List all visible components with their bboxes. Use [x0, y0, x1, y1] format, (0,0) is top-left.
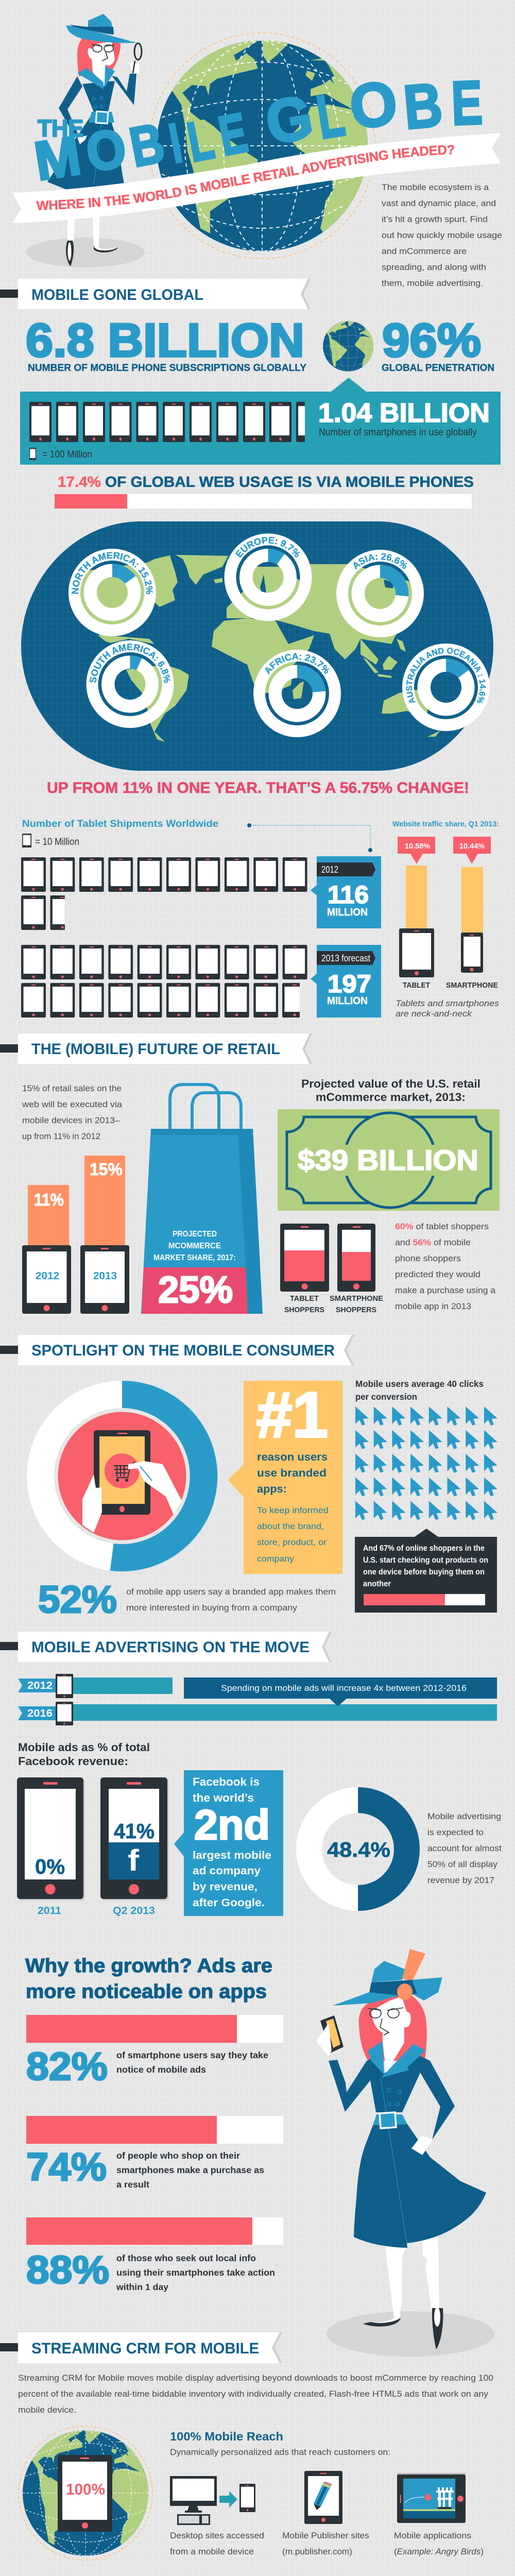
panel: 67% of online shoppers	[355, 1529, 497, 1613]
text: retail sales: web will be executed via	[22, 1099, 123, 1109]
heading: 100% Mobile Reach: 100% Mobile Reach	[170, 2430, 283, 2443]
heading: Why the growth: more noticeable on apps	[26, 1981, 267, 2003]
icon: tablet 60%	[280, 1224, 329, 1292]
text: shoppers prediction: mobile app in 2013	[395, 1301, 471, 1311]
text: mobile advertising 50%	[427, 1811, 502, 1885]
stat: 17.4% web usage: OF GLOBAL WEB USAGE IS VIA MOBILE PHONES	[105, 474, 474, 490]
captions: reach channels: Mobile Publisher sites	[282, 2531, 369, 2540]
heading: Mobile Advertising on the Move: MOBILE ADVERTISING ON THE MOVE	[31, 1639, 310, 1656]
text: shoppers prediction: and 56% of mobile	[395, 1238, 471, 1247]
title: The Mobile Globe: L	[312, 80, 349, 152]
icon: globe	[146, 30, 378, 259]
card: 2013 forecast, 197 million: MILLION	[327, 995, 368, 1007]
heading: tablet shipments: Number of Tablet Shipments Worldwide	[22, 819, 218, 829]
stat: 88% take action: using their smartphones take action	[116, 2267, 275, 2278]
banner: subtitle ribbon	[12, 133, 501, 223]
heading: Facebook revenue: Facebook revenue:	[18, 1755, 128, 1768]
stat: 17.4% web usage: 17.4%	[58, 474, 101, 490]
heading: Streaming CRM for Mobile	[0, 2332, 282, 2363]
heading: Mobile Advertising on the Move	[0, 1632, 332, 1662]
pictogram: 2013 forecast tablet shipments	[21, 945, 307, 1018]
hero: mobile globe illustration	[26, 30, 378, 267]
title: The Mobile Globe	[30, 68, 484, 192]
heading: Mobile Gone Global	[0, 279, 311, 309]
text: streaming CRM intro: mobile device.	[18, 2405, 76, 2415]
stat: 82% smartphone users: of smartphone users say they take	[116, 2050, 268, 2060]
stat: 82% smartphone users: notice of mobile ads	[116, 2064, 206, 2075]
chart: website traffic share: Website traffic share, Q1 2013:	[392, 820, 499, 828]
text: intro paragraph: and mCommerce are	[382, 246, 467, 256]
icon: smartphone	[461, 933, 483, 973]
panel: 67% of online shoppers: And 67% of online shoppers in the	[363, 1544, 485, 1553]
chart: phone Q2 2013, 41%	[100, 1777, 169, 1917]
card: 2012, 116 million: 116	[328, 882, 369, 909]
text: retail sales: mobile devices in 2013–	[22, 1115, 121, 1125]
text: intro paragraph: it’s hit a growth spurt. Find	[382, 214, 488, 224]
stat: 52%: more interested in buying from a company	[126, 1603, 298, 1613]
icon: tablet	[399, 928, 434, 977]
chart: website traffic share: 10.58%	[405, 842, 430, 851]
icon: globe with phone, 100%: 100%	[66, 2480, 105, 2498]
text: retail sales: up from 11% in 2012	[22, 1131, 100, 1141]
title: The Mobile Globe: B	[401, 70, 445, 142]
chart: phone Q2 2013, 41%: Q2 2013	[113, 1905, 155, 1917]
chart: ad spend 2012 vs 2016: 2016	[27, 1708, 53, 1719]
icon: globe with phone, 100%	[16, 2424, 154, 2560]
heading: projected value	[301, 1077, 480, 1104]
captions: reach channels: Desktop sites accessed	[170, 2531, 264, 2540]
text: mobile advertising 50%: account for almost	[427, 1843, 502, 1853]
icon: desktop to mobile	[170, 2476, 255, 2525]
text: 40 clicks per conversion: Mobile users average 40 clicks	[355, 1379, 484, 1389]
stat: 6.8 billion subscriptions: 6.8 BILLION	[26, 314, 304, 367]
panel: Facebook 2nd largest: by revenue,	[193, 1881, 258, 1893]
card: 2012, 116 million: MILLION	[327, 907, 368, 918]
title: The Mobile Globe: M	[30, 125, 85, 192]
panel: 67% of online shoppers: another	[363, 1580, 391, 1588]
panel: Facebook 2nd largest: the world’s	[193, 1791, 254, 1804]
captions: reach channels: from a mobile device	[170, 2547, 254, 2556]
panel: #1 reason for branded apps: company	[257, 1554, 295, 1564]
panel: Facebook 2nd largest: ad company	[193, 1865, 261, 1877]
heading: Facebook revenue: Mobile ads as % of total	[18, 1741, 150, 1754]
donut: Australia and Oceania 14.6%	[402, 643, 490, 731]
text: mobile advertising 50%: is expected to	[427, 1827, 484, 1837]
text: intro paragraph: vast and dynamic place, and	[382, 198, 496, 208]
text: shoppers prediction: 60% of tablet shoppers	[395, 1222, 489, 1231]
stat: 52%: of mobile app users say a branded app makes them	[126, 1587, 336, 1597]
icon: small globe	[320, 318, 376, 371]
heading: Why the growth	[25, 1955, 272, 2003]
text: mobile advertising 50%: Mobile advertising	[427, 1811, 501, 1821]
character: detective woman with magnifier	[47, 14, 142, 266]
panel: smartphones in use	[20, 378, 501, 465]
chart: phone 2011, 0%: 2011	[38, 1905, 61, 1917]
panel: 67% of online shoppers: U.S. start checking out products on	[363, 1556, 488, 1565]
bar: 17.4%	[55, 494, 472, 509]
donut: Asia 26.6%	[336, 550, 424, 637]
card: 2012, 116 million: 2012	[321, 865, 338, 875]
pictogram: 2012 tablet shipments	[21, 857, 307, 930]
heading: The (Mobile) Future of Retail	[0, 1033, 312, 1064]
callout: 4x increase	[184, 1677, 497, 1706]
card: 2012, 116 million	[311, 856, 381, 928]
legend: 1 icon = 10 million	[22, 834, 79, 848]
card: 2013 forecast, 197 million	[311, 945, 381, 1018]
bar: 88%	[26, 2217, 283, 2245]
text: streaming CRM intro: Streaming CRM for Mobile moves mobile display advertising beyond downloads to boost mCommerce by reaching 100	[18, 2373, 493, 2383]
title: The Mobile Globe: B	[125, 111, 169, 179]
donut: 48.4% display revenue	[296, 1787, 420, 1911]
stat: 74% make a purchase	[26, 2145, 264, 2190]
panel: 67% of online shoppers: one device before buying them on	[363, 1568, 485, 1577]
heading: The (Mobile) Future of Retail: THE (MOBILE) FUTURE OF RETAIL	[31, 1041, 280, 1058]
banner: subtitle ribbon: WHERE IN THE WORLD IS MOBILE RETAIL ADVERTISING HEADED?	[36, 145, 454, 210]
text: shoppers prediction: phone shoppers	[395, 1253, 461, 1263]
heading: Mobile Gone Global: MOBILE GONE GLOBAL	[31, 286, 203, 303]
chart: phone 2011, 0%: 0%	[35, 1855, 65, 1878]
title: The Mobile Globe: E	[450, 68, 484, 138]
heading: Spotlight on the Mobile Consumer	[0, 1335, 354, 1365]
captions: reach channels: (m.publisher.com)	[282, 2547, 352, 2556]
icon: phone with shopping cart	[82, 1430, 182, 1533]
chart: 2012 vs 2013 retail share	[22, 1156, 129, 1314]
donut: Australia and Oceania 14.6%: AUSTRALIA AND OCEANIA : 14.6%	[406, 648, 486, 703]
icon: shopping bag, 25% mCommerce share: PROJECTED	[173, 1230, 217, 1239]
heading: Facebook revenue	[18, 1741, 150, 1768]
chart: website traffic share: Tablets and smartphones	[396, 998, 500, 1008]
chart: phone 2011, 0%	[17, 1777, 85, 1917]
text: streaming CRM intro	[18, 2373, 493, 2415]
donut: North America 15.2%	[68, 549, 156, 636]
panel: Facebook 2nd largest	[174, 1770, 283, 1916]
icon: publisher phone with pencil	[304, 2471, 342, 2524]
text: 40 clicks per conversion: per conversion	[355, 1392, 417, 1402]
stat: 88% take action: 88%	[26, 2248, 109, 2292]
captions: reach channels: (Example: Angry Birds)	[394, 2547, 484, 2556]
text: intro paragraph: The mobile ecosystem is a	[382, 182, 489, 192]
heading: 100% Mobile Reach: Dynamically personalized ads that reach customers on:	[170, 2447, 390, 2457]
chart: ad spend 2012 vs 2016: 2012	[27, 1680, 53, 1691]
chart: tablet and smartphone shoppers: SHOPPERS	[336, 1306, 376, 1314]
stat: 74% make a purchase: 74%	[26, 2145, 107, 2189]
stat: 52%: 52%	[38, 1578, 117, 1621]
panel: Facebook 2nd largest: 2nd	[194, 1802, 270, 1849]
stat: 74% make a purchase: smartphones make a purchase as	[116, 2165, 264, 2175]
stat: 88% take action: within 1 day	[116, 2282, 168, 2292]
donut: South America 6.8%: SOUTH AMERICA: 6.8%	[90, 643, 170, 683]
panel: #1 reason for branded apps: store, product, or	[257, 1537, 327, 1547]
icon: phone 2012	[22, 1245, 71, 1314]
callout: 56.75% change: UP FROM 11% IN ONE YEAR. THAT’S A 56.75% CHANGE!	[47, 779, 469, 796]
donut: Europe 9.7%: EUROPE: 9.7%	[235, 537, 300, 557]
chart: 2012 vs 2013 retail share: 11%	[34, 1190, 64, 1209]
text: mobile advertising 50%: revenue by 2017	[427, 1875, 494, 1885]
pictogram: phones, 1 icon = 100 million	[29, 402, 318, 442]
panel: Facebook 2nd largest: Facebook is	[193, 1775, 260, 1788]
chart: ad spend 2012 vs 2016	[18, 1674, 497, 1725]
captions: reach channels	[170, 2531, 484, 2556]
text: intro paragraph: out how quickly mobile usage	[382, 230, 502, 240]
callout: 4x increase: Spending on mobile ads will increase 4x between 2012-2016	[221, 1683, 467, 1693]
panel: smartphones in use: = 100 Million	[42, 449, 92, 460]
panel: #1 reason for branded apps: To keep informed	[257, 1505, 329, 1515]
title: The Mobile Globe: L	[182, 108, 219, 174]
title: The Mobile Globe: O	[82, 117, 131, 184]
panel: #1 reason for branded apps	[228, 1380, 342, 1574]
panel: $39 billion bill: $39 BILLION	[298, 1144, 478, 1176]
chart: 2012 vs 2013 retail share: 2013	[93, 1270, 117, 1282]
chart: website traffic share	[392, 820, 500, 1019]
stat: 88% take action	[26, 2248, 275, 2292]
chart: tablet and smartphone shoppers: SHOPPERS	[284, 1306, 324, 1314]
chart: 2012 vs 2013 retail share: 2012	[36, 1270, 59, 1282]
heading: Streaming CRM for Mobile: STREAMING CRM FOR MOBILE	[31, 2340, 259, 2357]
donut: Africa 23.7%: AFRICA: 23.7%	[265, 653, 330, 675]
donut: North America 15.2%: NORTH AMERICA: 15.2%	[72, 552, 153, 595]
donut: South America 6.8%	[87, 640, 174, 728]
stat: 82% smartphone users	[26, 2045, 268, 2089]
connector line	[247, 823, 372, 852]
icon: smartphone 56%	[337, 1224, 375, 1292]
text: intro paragraph: them, mobile advertising.	[382, 278, 483, 288]
panel: #1 reason for branded apps: use branded	[257, 1467, 327, 1479]
text: mobile advertising 50%: 50% of all display	[427, 1859, 497, 1869]
panel: Facebook 2nd largest: largest mobile	[193, 1850, 271, 1861]
stat: 52%	[38, 1578, 336, 1621]
heading: Spotlight on the Mobile Consumer: SPOTLIGHT ON THE MOBILE CONSUMER	[31, 1342, 335, 1359]
heading: projected value: mCommerce market, 2013:	[316, 1091, 466, 1104]
title: The Mobile Globe: THE	[38, 115, 83, 142]
heading: Why the growth: Why the growth? Ads are	[25, 1955, 272, 1977]
text: shoppers prediction: make a purchase using a	[395, 1285, 496, 1295]
donut: Asia 26.6%: ASIA: 26.6%	[353, 553, 408, 570]
icon: app tablet	[397, 2473, 466, 2523]
card: 2013 forecast, 197 million: 197	[328, 971, 371, 998]
stat: 88% take action: of those who seek out local info	[116, 2253, 256, 2263]
title: The Mobile Globe: E	[214, 101, 252, 167]
text: shoppers prediction: predicted they would	[395, 1269, 480, 1279]
text: streaming CRM intro: percent of the available real-time biddable inventory with individually created, Flash-free HTML5 ads that work on any	[18, 2389, 489, 2399]
stat: 74% make a purchase: a result	[116, 2179, 149, 2190]
title: The Mobile Globe: O	[346, 68, 401, 142]
donut: 52% branded app interest	[27, 1381, 217, 1571]
text: retail sales: 15% of retail sales on the	[22, 1083, 122, 1093]
chart: website traffic share: TABLET	[403, 981, 430, 990]
stat: 96% global penetration: GLOBAL PENETRATION	[382, 363, 494, 374]
chart: 2012 vs 2013 retail share: 15%	[90, 1160, 123, 1179]
text: intro paragraph	[382, 182, 502, 288]
panel: smartphones in use: 1.04 BILLION	[318, 398, 490, 428]
chart: tablet and smartphone shoppers	[280, 1224, 383, 1314]
stat: 74% make a purchase: of people who shop on their	[116, 2150, 240, 2161]
map: world with regional shares	[21, 521, 493, 771]
bar: 82%	[26, 2015, 283, 2043]
panel: Facebook 2nd largest: after Google.	[193, 1897, 265, 1909]
panel: $39 billion bill	[278, 1109, 500, 1211]
icon: shopping bag, 25% mCommerce share	[141, 1084, 263, 1314]
text: intro paragraph: spreading, and along with	[382, 262, 486, 272]
panel: #1 reason for branded apps: about the brand,	[257, 1521, 324, 1531]
donut: 48.4% display revenue: 48.4%	[327, 1838, 390, 1861]
panel: smartphones in use: Number of smartphones in use globally	[319, 427, 477, 438]
donut: Europe 9.7%	[225, 534, 312, 621]
chart: tablet and smartphone shoppers: SMARTPHONE	[330, 1294, 383, 1303]
panel: #1 reason for branded apps: apps:	[257, 1483, 287, 1495]
icon: shopping bag, 25% mCommerce share: MARKET SHARE, 2017:	[153, 1253, 236, 1262]
chart: phone Q2 2013, 41%: f	[128, 1844, 140, 1877]
chart: website traffic share: SMARTPHONE	[446, 981, 498, 990]
stat: 96% global penetration: 96%	[382, 314, 481, 367]
legend: 1 icon = 10 million: = 10 Million	[35, 837, 79, 848]
icon: shopping bag, 25% mCommerce share: 25%	[158, 1269, 233, 1311]
captions: reach channels: Mobile applications	[394, 2531, 471, 2540]
panel: #1 reason for branded apps: #1	[256, 1380, 328, 1451]
title: The Mobile Globe: G	[261, 82, 318, 158]
chart: phone Q2 2013, 41%: 41%	[114, 1819, 154, 1843]
stat: 82% smartphone users: 82%	[26, 2045, 108, 2089]
chart: website traffic share: 10.44%	[459, 842, 485, 851]
text: retail sales	[22, 1083, 123, 1141]
bar: 74%	[26, 2116, 283, 2144]
heading: 100% Mobile Reach	[170, 2430, 390, 2457]
pictogram: 40 cursors	[355, 1406, 497, 1520]
stat: 6.8 billion subscriptions: NUMBER OF MOBILE PHONE SUBSCRIPTIONS GLOBALLY	[28, 363, 306, 374]
panel: #1 reason for branded apps: reason users	[257, 1451, 328, 1463]
title: The Mobile Globe: I	[164, 111, 186, 175]
icon: shopping bag, 25% mCommerce share: MCOMMERCE	[168, 1242, 221, 1250]
chart: tablet and smartphone shoppers: TABLET	[290, 1294, 319, 1303]
text: shoppers prediction	[395, 1222, 496, 1311]
chart: website traffic share: are neck-and-neck	[396, 1009, 473, 1019]
character: woman with phone	[316, 1949, 494, 2357]
text: 40 clicks per conversion	[355, 1379, 484, 1402]
heading: projected value: Projected value of the U.S. retail	[301, 1077, 480, 1090]
icon: phone 2013	[80, 1245, 129, 1314]
card: 2013 forecast, 197 million: 2013 forecast	[321, 953, 370, 963]
donut: Africa 23.7%	[253, 650, 341, 737]
